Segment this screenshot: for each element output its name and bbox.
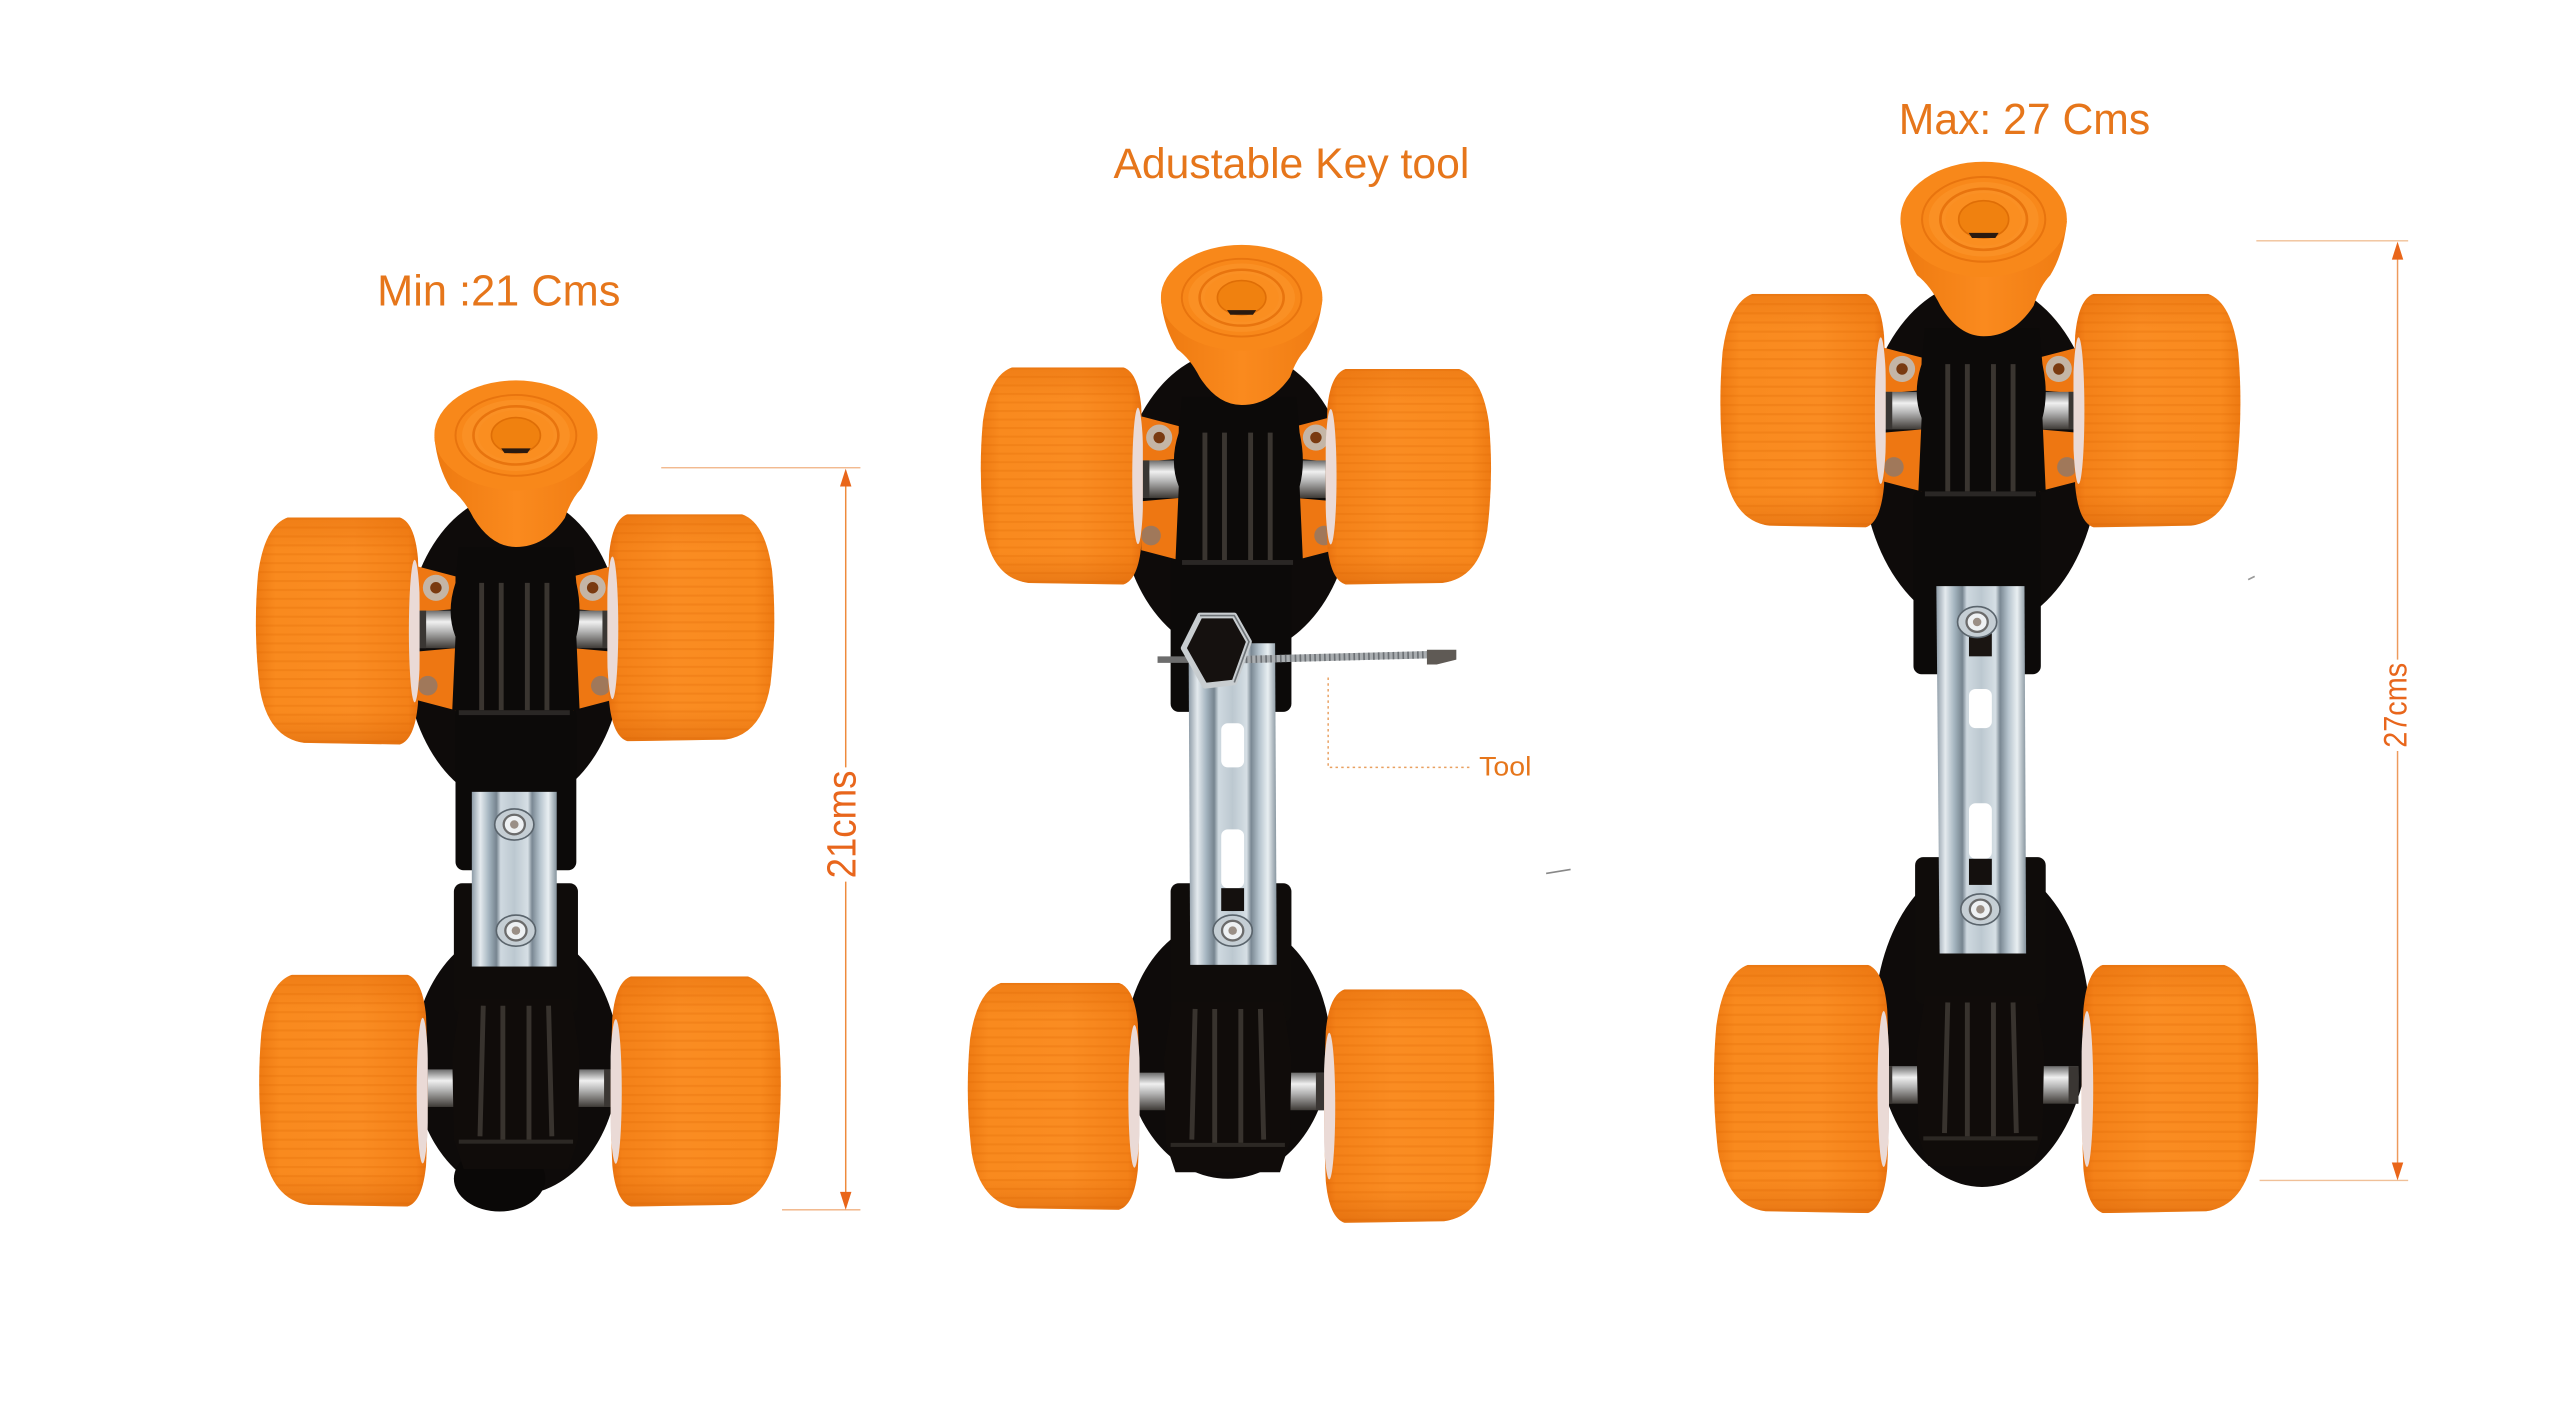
adjustable key tool	[1158, 616, 1456, 686]
plate bolts	[495, 809, 536, 946]
rear truck	[418, 999, 614, 1169]
dimension: 21cms	[661, 468, 865, 1210]
title: adjustable key tool: Adustable Key tool	[1113, 140, 1469, 187]
wheel: front left	[981, 367, 1144, 584]
wheel: rear left	[259, 975, 429, 1207]
front truck	[1140, 397, 1336, 565]
front truck	[416, 547, 612, 715]
steel extension plate	[1189, 643, 1277, 965]
skate: minimum length	[256, 380, 781, 1211]
rear truck	[1882, 996, 2078, 1166]
rear truck	[1130, 1002, 1326, 1172]
label: 27cms: 27cms	[2377, 663, 2414, 748]
plate bolts	[1958, 607, 2000, 925]
speck	[2248, 576, 2255, 580]
wheel: rear right	[2081, 965, 2258, 1213]
title: minimum size: Min :21 Cms	[377, 267, 620, 315]
wheel: front left	[1720, 294, 1887, 527]
plate slots	[1221, 723, 1244, 911]
rear truck bracket	[454, 883, 578, 1014]
front truck lug	[1171, 555, 1291, 712]
skate: with key tool	[968, 245, 1494, 1223]
front truck lug	[456, 707, 576, 870]
front base plate	[405, 493, 624, 807]
front base plate	[1120, 349, 1352, 656]
callout: tool	[1328, 678, 1531, 782]
front base plate	[1861, 281, 2100, 630]
rear base plate	[1874, 860, 2090, 1187]
wheel: rear left	[1714, 965, 1890, 1213]
label: tool: Tool	[1479, 752, 1531, 782]
wheel: front right	[1325, 369, 1491, 584]
toe stop	[434, 380, 598, 547]
rear truck bracket	[1915, 857, 2046, 1004]
rear base plate	[413, 927, 619, 1195]
dimension: 27cms	[2256, 241, 2414, 1180]
rear bump	[454, 1146, 545, 1211]
title: maximum size: Max: 27 Cms	[1899, 96, 2150, 144]
wheel: rear right	[610, 976, 781, 1207]
label: 21cms: 21cms	[819, 771, 865, 878]
toe stop	[1900, 162, 2067, 336]
plate slots	[1969, 633, 1992, 885]
steel extension plate	[1936, 586, 2026, 953]
wheel: front right	[2073, 294, 2240, 527]
front truck	[1882, 328, 2078, 496]
rear base plate	[1125, 918, 1331, 1179]
speck	[1546, 869, 1571, 873]
wheel: front right	[607, 514, 774, 741]
toe stop	[1161, 245, 1322, 405]
rear truck bracket	[1171, 883, 1291, 1022]
skate: maximum length	[1714, 162, 2258, 1213]
wheel: front left	[256, 518, 420, 745]
steel extension plate	[472, 792, 557, 967]
wheel: rear left	[968, 983, 1140, 1210]
front truck lug	[1913, 490, 2041, 674]
wheel: rear right	[1323, 989, 1494, 1223]
plate bolt	[1213, 915, 1252, 946]
